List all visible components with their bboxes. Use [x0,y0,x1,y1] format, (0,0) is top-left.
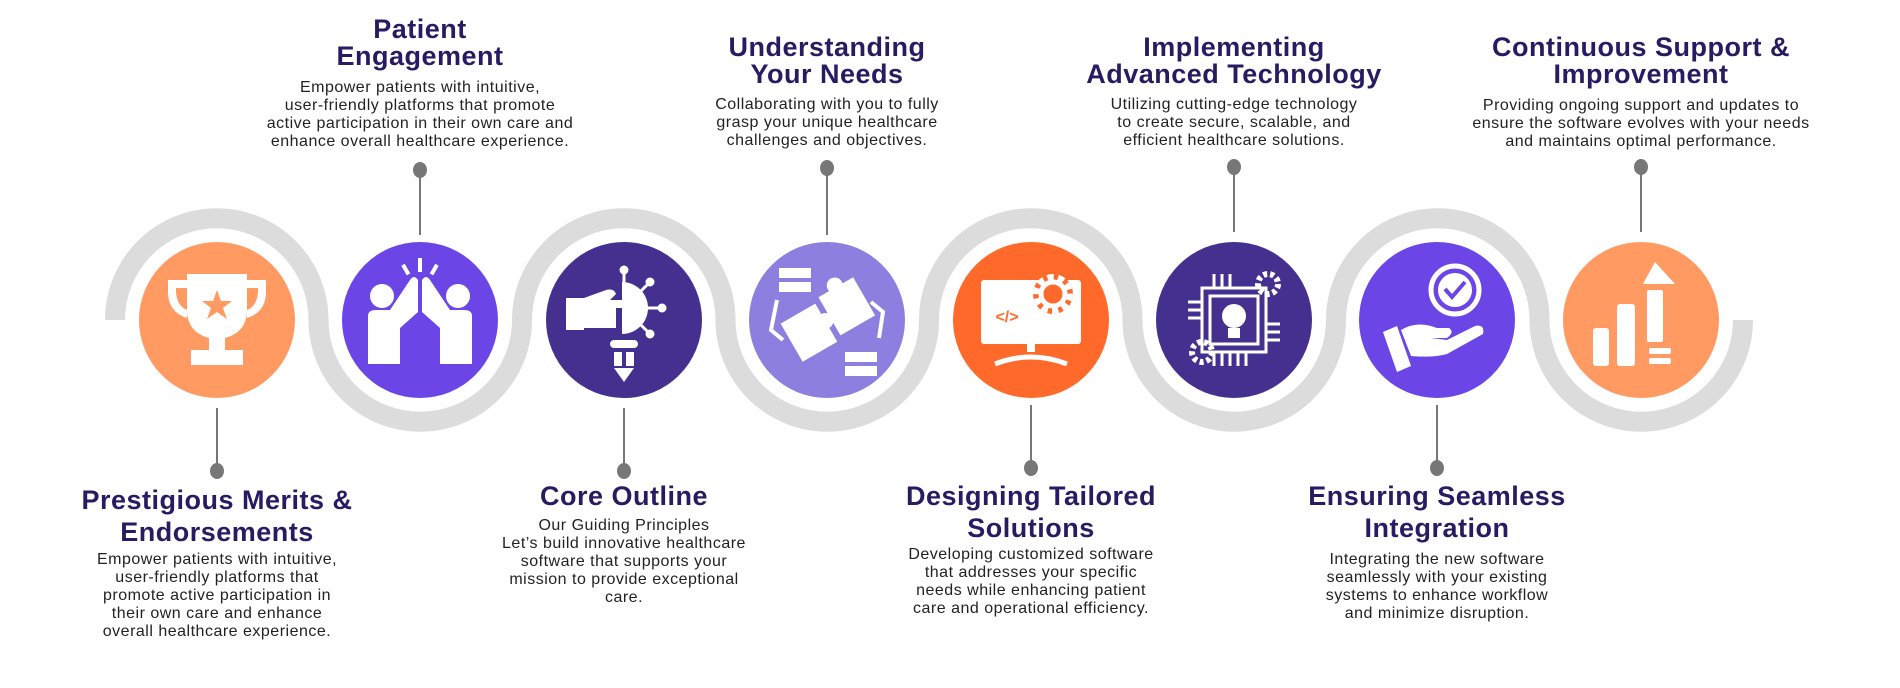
text: Prestigious Merits [81,485,353,640]
text: Implementing Advanced Technology [1086,32,1382,149]
text: Designing Tailored Solutions: care and operational efficiency. [913,600,1149,617]
icon: monitor with code and gear [953,242,1109,398]
text: Understanding Your Needs [715,32,939,149]
text: Patient Engagement [267,14,573,150]
text: Ensuring Seamless Integration: Integration [1364,513,1510,543]
text: Ensuring Seamless Integration: seamlessly with your existing [1327,569,1547,586]
text: Understanding Your Needs: Collaborating with you to fully [715,96,939,113]
text: Understanding Your Needs: grasp your unique healthcare [716,114,938,131]
text: Designing Tailored Solutions [906,481,1156,617]
text: Ensuring Seamless Integration [1308,481,1566,622]
icon: chip with bulb and gears [1156,242,1312,398]
text: Implementing Advanced Technology: Implementing [1143,32,1325,62]
text: Implementing Advanced Technology: to create secure, scalable, and [1117,114,1351,131]
text: Core Outline: Let’s build innovative healthcare [502,535,746,552]
icon: growth chart [1563,242,1719,398]
icon: monitor with code and gear: </> [995,309,1019,326]
text: Designing Tailored Solutions: Solutions [967,513,1095,543]
text: Designing Tailored Solutions: that addresses your specific [925,564,1137,581]
text: Prestigious Merits: Endorsements [120,517,314,547]
text: Prestigious Merits: promote active participation in [103,587,331,604]
connectors [211,160,1647,478]
text: Ensuring Seamless Integration: systems to enhance workflow [1326,587,1548,604]
text: Core Outline: Our Guiding Principles [538,517,710,534]
text: Understanding Your Needs: Understanding [728,32,926,62]
text: Designing Tailored Solutions: Developing customized software [908,546,1154,563]
text: Understanding Your Needs: Your Needs [750,59,904,89]
text: Continuous Support: Continuous Support & [1492,32,1790,62]
text: Implementing Advanced Technology: efficient healthcare solutions. [1123,132,1345,149]
text: Continuous Support: ensure the software evolves with your needs [1472,115,1810,132]
text: Prestigious Merits: Prestigious Merits & [81,485,353,515]
text: Designing Tailored Solutions: needs while enhancing patient [916,582,1146,599]
text: Prestigious Merits: their own care and enhance [112,605,322,622]
icon: trophy [139,242,295,398]
wave path [115,218,1743,422]
text: Continuous Support [1472,32,1810,150]
text: Core Outline [502,481,746,606]
icon: puzzle [749,242,905,398]
text: Continuous Support: Improvement [1553,59,1729,89]
text: Continuous Support: Providing ongoing support and updates to [1483,97,1799,114]
text: Patient Engagement: enhance overall healthcare experience. [271,133,569,150]
text: Patient Engagement: Empower patients with intuitive, [300,79,540,96]
text: Ensuring Seamless Integration: Ensuring Seamless [1308,481,1566,511]
text: Prestigious Merits: user-friendly platforms that [115,569,319,586]
text: Prestigious Merits: overall healthcare experience. [103,623,331,640]
text: Prestigious Merits: Empower patients with intuitive, [97,551,337,568]
text: Designing Tailored Solutions: Designing Tailored [906,481,1156,511]
text: Core Outline: mission to provide exceptional [509,571,739,588]
text: Core Outline: software that supports your [521,553,727,570]
text: Core Outline: Core Outline [540,481,708,511]
text: Patient Engagement: user-friendly platforms that promote [285,97,555,114]
icon: high five [342,242,498,398]
text: Patient Engagement: Engagement [336,41,504,71]
text: Ensuring Seamless Integration: and minimize disruption. [1345,605,1529,622]
text: Implementing Advanced Technology: Advanced Technology [1086,59,1382,89]
text: Implementing Advanced Technology: Utilizing cutting-edge technology [1111,96,1357,113]
icon: hand and bulb pencil [546,242,702,398]
text: Ensuring Seamless Integration: Integrating the new software [1329,551,1544,568]
text: Patient Engagement: active participation in their own care and [267,115,573,132]
text: Patient Engagement: Patient [373,14,467,44]
text: Understanding Your Needs: challenges and objectives. [727,132,927,149]
icon: hand with check [1359,242,1515,398]
text: Continuous Support: and maintains optimal performance. [1505,133,1777,150]
text: Core Outline: care. [605,589,643,606]
